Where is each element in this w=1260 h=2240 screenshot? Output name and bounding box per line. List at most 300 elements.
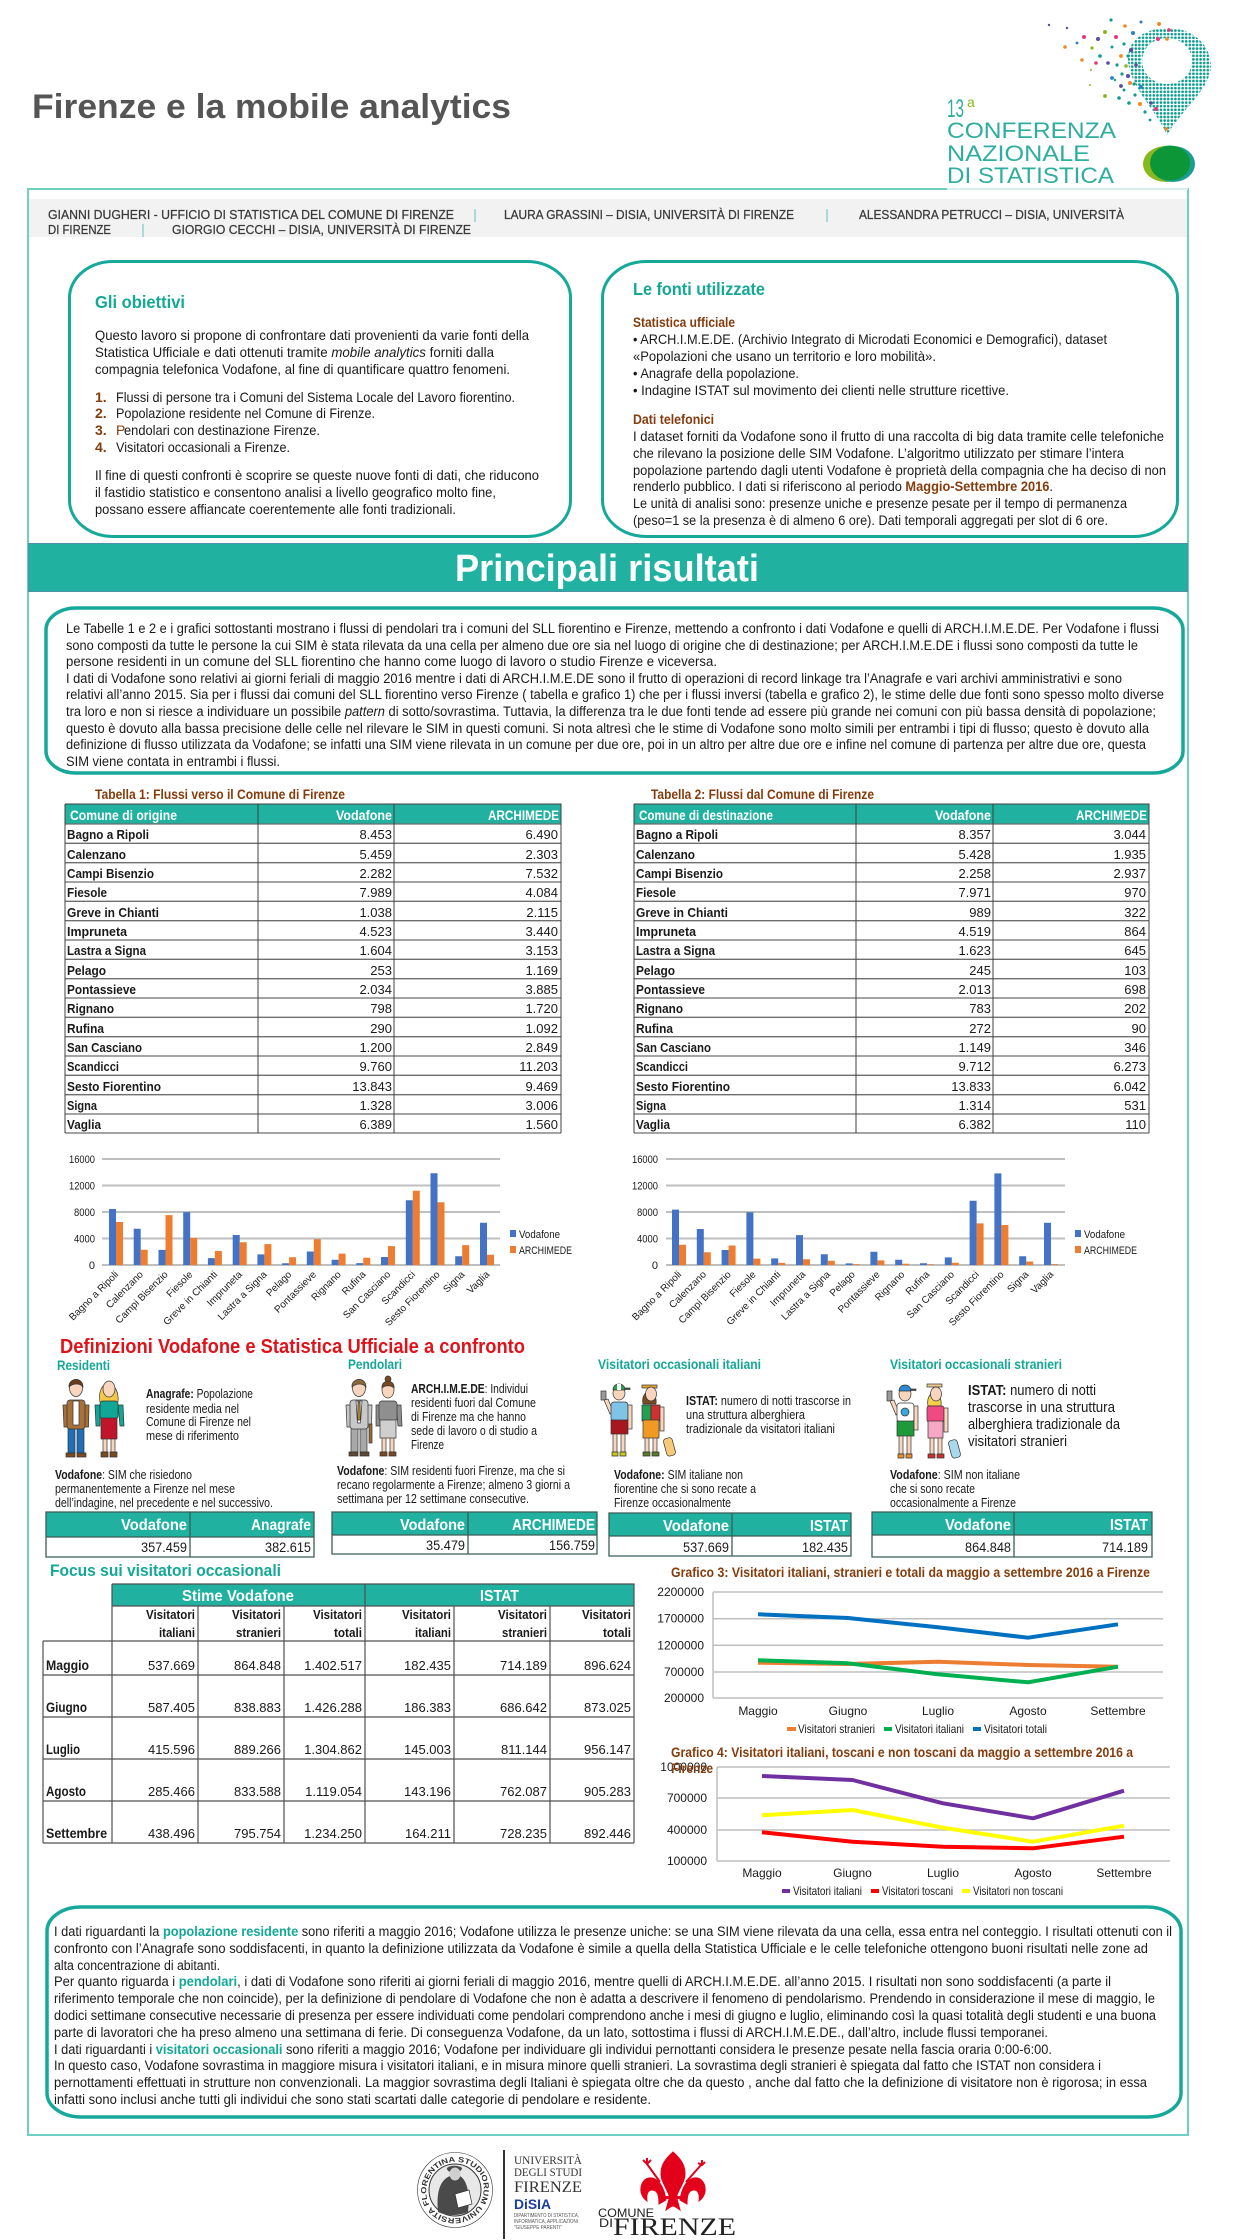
residenti table: 382.615 bbox=[265, 1539, 311, 1555]
table 2: Comune di destinazione bbox=[639, 808, 773, 823]
table 2: 9.712 bbox=[958, 1059, 991, 1074]
table values: 182.435 bbox=[404, 1658, 451, 1673]
chart 2: bar chart: 0 bbox=[652, 1260, 658, 1272]
table 1: Impruneta bbox=[67, 924, 128, 939]
table 2: Scandicci bbox=[636, 1059, 688, 1074]
icon: florentine lily bbox=[641, 2152, 705, 2210]
panel: conclusions: I dati riguardanti i visitatori occasionali sono riferiti a maggio 2016; Vodafone per individuare gli individui pernottanti considera le presenze pesate nella fascia oraria 0:00-6:00. bbox=[54, 2042, 1052, 2057]
table values: 956.147 bbox=[584, 1742, 631, 1757]
table 1: 1.200 bbox=[359, 1040, 392, 1055]
table 2: 2.937 bbox=[1113, 866, 1146, 881]
panel: text results: Le Tabelle 1 e 2 e i grafici sottostanti mostrano i flussi di pendolari tra i comuni del SLL fiorentino e Firenze, mettendo a confronto i dati Vodafone e quelli di ARCH.I.M.E.DE. Per Vodafone i flussi bbox=[66, 621, 1159, 636]
archimede definition: Firenze bbox=[411, 1437, 444, 1452]
chart 2: bar chart: Scandicci bbox=[944, 1269, 982, 1307]
numbered list: 2. bbox=[95, 405, 107, 421]
table 1: 4.084 bbox=[525, 885, 558, 900]
vodafone definition bbox=[890, 1467, 1020, 1510]
chart 1: bar chart: 0 bbox=[89, 1260, 95, 1272]
chart 3 legend bbox=[787, 1722, 1047, 1736]
vodafone definition: Vodafone: SIM italiane non bbox=[614, 1467, 743, 1482]
panel: conclusions: riferimento temporale che non coincide), per la definizione di pendolare di Vodafone che non è adatta a descrivere il fenomeno di pendolarismo. Prendendo in considerazione il mese di maggio, le bbox=[54, 1991, 1155, 2006]
chart 1: bar chart: Calenzano bbox=[104, 1269, 146, 1311]
table values: 1.304.862 bbox=[304, 1742, 362, 1757]
row labels: Giugno bbox=[46, 1699, 87, 1715]
vodafone definition: dell’indagine, nel precedente e nel successivo. bbox=[55, 1495, 273, 1510]
vodafone definition: Vodafone: SIM residenti fuori Firenze, ma che si bbox=[337, 1463, 565, 1478]
chart 1: bar chart bbox=[67, 1154, 572, 1329]
table 1: Comune di origine bbox=[70, 808, 177, 823]
authors strip: GIORGIO CECCHI – DISIA, UNIVERSITÀ DI FIRENZE bbox=[172, 222, 471, 237]
table values: 186.383 bbox=[404, 1700, 451, 1715]
chart 3 legend: Visitatori italiani bbox=[895, 1722, 964, 1736]
closing text: il fastidio statistico e consentono analisi a livello geografico molto fine, bbox=[95, 484, 496, 500]
istat definition bbox=[686, 1393, 851, 1436]
column headers: Visitatori bbox=[498, 1607, 547, 1622]
focus heading: Focus sui visitatori occasionali bbox=[50, 1561, 281, 1580]
column headers: Visitatori bbox=[146, 1607, 195, 1622]
chart 1: bar chart: Sesto Fiorentino bbox=[383, 1269, 443, 1329]
table 1: 2.303 bbox=[525, 847, 558, 862]
chart 2: bar chart: Signa bbox=[1005, 1269, 1032, 1295]
chart 4: line chart: 1000000 bbox=[660, 1760, 707, 1774]
logo: universita di firenze bbox=[417, 2150, 583, 2239]
chart 4: line chart: 100000 bbox=[667, 1854, 707, 1868]
logo wordmark: DI STATISTICA bbox=[947, 163, 1114, 188]
numbered list: Popolazione residente nel Comune di Firenze. bbox=[116, 405, 375, 421]
archimede definition: ARCH.I.M.E.DE: Individui bbox=[411, 1381, 528, 1396]
panel: conclusions: pernottamenti effettuati in strutture non convenzionali. La maggior sovrastima degli Italiani è spiegata oltre che da questo , anche dal fatto che la definizione di visitatore non è rigorosa; in essa bbox=[54, 2075, 1147, 2090]
chart 3: line chart: Giugno bbox=[829, 1704, 868, 1718]
icon: dotted pin bbox=[1048, 18, 1211, 135]
column headers: totali bbox=[334, 1625, 362, 1640]
chart 2 legend bbox=[1075, 1229, 1137, 1257]
chart 2: bar chart: Impruneta bbox=[769, 1269, 808, 1309]
focus table: ISTAT bbox=[480, 1588, 519, 1605]
table 2: ARCHIMEDE bbox=[1076, 808, 1147, 823]
vodafone definition: recano regolarmente a Firenze; almeno 3 giorni a bbox=[337, 1477, 571, 1492]
table 2: 1.149 bbox=[958, 1040, 991, 1055]
panel: text results: I dati di Vodafone sono relativi ai giorni feriali di maggio 2016 mentre i dati di ARCH.I.M.E.DE sono il frutto di operazioni di record linkage tra l’Anagrafe e vari archivi amministrativi e sono bbox=[66, 671, 1122, 686]
pendolari heading: Pendolari bbox=[348, 1356, 402, 1372]
table 1: Sesto Fiorentino bbox=[67, 1079, 161, 1094]
chart 2: bar chart: 16000 bbox=[632, 1154, 658, 1166]
pendolari table bbox=[332, 1512, 597, 1554]
chart 1: bar chart: Scandicci bbox=[380, 1269, 418, 1307]
numbered list bbox=[95, 389, 515, 455]
table 1: Pontassieve bbox=[67, 982, 136, 997]
table 1: 5.459 bbox=[359, 847, 392, 862]
chart 2: bar chart: Campi Bisenzio bbox=[677, 1269, 734, 1326]
table 2: Fiesole bbox=[636, 885, 676, 900]
vodafone definition: fiorentine che si sono recate a bbox=[614, 1481, 757, 1496]
residenti table bbox=[46, 1512, 314, 1557]
anagrafe definition: Anagrafe: Popolazione bbox=[146, 1386, 253, 1401]
pendolari table: 35.479 bbox=[426, 1537, 465, 1553]
table 2: 989 bbox=[969, 905, 991, 920]
istat definition: una struttura alberghiera bbox=[686, 1407, 806, 1422]
panel: pendolari bbox=[332, 1356, 597, 1554]
icon: commuters couple bbox=[346, 1376, 402, 1456]
vodafone definition bbox=[337, 1463, 571, 1506]
table 2: Pelago bbox=[636, 963, 675, 978]
table 2: 322 bbox=[1124, 905, 1146, 920]
chart 1 legend bbox=[510, 1229, 572, 1257]
table 2: Vodafone bbox=[935, 808, 991, 823]
chart 4: line chart: Luglio bbox=[927, 1866, 959, 1880]
column headers: totali bbox=[603, 1625, 631, 1640]
archimede definition: sede di lavoro o di studio a bbox=[411, 1423, 538, 1438]
table values: 873.025 bbox=[584, 1700, 631, 1715]
panel: text results: tra loro e non si riesce a individuare un possibile pattern di sotto/sovrastima. Tuttavia, la differenza tra le due fonti tende ad essere più grande nei comuni con più bassa densità di popolazione; bbox=[66, 704, 1156, 719]
table 2: Pontassieve bbox=[636, 982, 705, 997]
table 1: 2.849 bbox=[525, 1040, 558, 1055]
vodafone definition bbox=[55, 1467, 273, 1510]
table 1: 2.282 bbox=[359, 866, 392, 881]
table 2: 110 bbox=[1125, 1117, 1146, 1132]
table 2: 5.428 bbox=[958, 847, 991, 862]
panel: conclusions: dodici settimane consecutive necessarie di presenza per essere individuati come pendolari comprendono anche i mesi di giugno e luglio, eliminando così la quasi totalità degli studenti e una buona bbox=[54, 2008, 1156, 2023]
chart 2: bar chart: 12000 bbox=[632, 1180, 658, 1192]
icon: residents couple bbox=[63, 1379, 124, 1457]
panel: conclusions: In questo caso, Vodafone sovrastima in maggiore misura i visitatori italiani, e in misura minore quelli stranieri. La sovrastima degli stranieri è spiegata dal fatto che ISTAT non considera i bbox=[54, 2058, 1101, 2073]
dati telefonici: renderlo pubblico. I dati si riferiscono al periodo Maggio-Settembre 2016. bbox=[633, 478, 1053, 494]
table values: 905.283 bbox=[584, 1784, 631, 1799]
chart 2: bar chart: Fiesole bbox=[728, 1269, 759, 1300]
table 1: Greve in Chianti bbox=[67, 905, 159, 920]
panel: text results: SIM viene contata in entrambi i flussi. bbox=[66, 754, 280, 769]
panel: le fonti utilizzate bbox=[602, 262, 1178, 536]
table 1: 11.203 bbox=[519, 1059, 558, 1074]
table 2: 3.044 bbox=[1113, 827, 1146, 842]
chart 3: line chart: Agosto bbox=[1009, 1704, 1047, 1718]
table values: 714.189 bbox=[500, 1658, 547, 1673]
logo wordmark: a bbox=[967, 94, 975, 110]
table 2: 4.519 bbox=[958, 924, 991, 939]
column headers: stranieri bbox=[502, 1625, 547, 1640]
closing text: possano essere affiancate coerentemente alle fonti tradizionali. bbox=[95, 501, 456, 517]
chart 1: bar chart: Impruneta bbox=[205, 1269, 245, 1309]
icon: foreign tourists bbox=[887, 1384, 961, 1459]
table values: 811.144 bbox=[501, 1742, 547, 1757]
chart 4 legend: Visitatori non toscani bbox=[973, 1884, 1063, 1898]
table values: 143.196 bbox=[404, 1784, 451, 1799]
vodafone definition: occasionalmente a Firenze bbox=[890, 1495, 1016, 1510]
frame bbox=[28, 189, 1188, 2135]
vodafone definition bbox=[614, 1467, 757, 1510]
logo wordmark: NAZIONALE bbox=[947, 141, 1090, 166]
table 1: 1.560 bbox=[525, 1117, 558, 1132]
istat definition: visitatori stranieri bbox=[968, 1433, 1067, 1450]
table 1: 7.989 bbox=[359, 885, 392, 900]
visitatori stranieri table: 714.189 bbox=[1102, 1539, 1148, 1555]
table 1: Lastra a Signa bbox=[67, 943, 147, 958]
authors strip: GIANNI DUGHERI - UFFICIO DI STATISTICA DEL COMUNE DI FIRENZE bbox=[48, 208, 454, 222]
comune wordmark: COMUNE bbox=[598, 2206, 654, 2220]
table 1: Rufina bbox=[67, 1021, 105, 1036]
table 2: 698 bbox=[1124, 982, 1146, 997]
authors strip: DI FIRENZE bbox=[48, 223, 111, 237]
table 2: 645 bbox=[1124, 943, 1146, 958]
statistica ufficiale: • Anagrafe della popolazione. bbox=[633, 365, 799, 381]
table 2: 103 bbox=[1124, 963, 1146, 978]
chart 3 title: Grafico 3: Visitatori italiani, stranieri e totali da maggio a settembre 2016 a Firenze bbox=[671, 1564, 1150, 1580]
chart 1: bar chart: 8000 bbox=[74, 1207, 95, 1219]
column headers: stranieri bbox=[236, 1625, 281, 1640]
chart 1: bar chart: Campi Bisenzio bbox=[114, 1269, 171, 1326]
table 1: 6.389 bbox=[359, 1117, 392, 1132]
pendolari table: Vodafone bbox=[400, 1517, 465, 1534]
table 1: 3.885 bbox=[525, 982, 558, 997]
chart 2: bar chart: Sesto Fiorentino bbox=[947, 1269, 1007, 1329]
vodafone definition: permanentemente a Firenze nel mese bbox=[55, 1481, 235, 1496]
table 1: 3.440 bbox=[525, 924, 558, 939]
dati telefonici: Dati telefonici bbox=[633, 411, 714, 427]
table 1: 1.328 bbox=[359, 1098, 392, 1113]
table 2: 864 bbox=[1124, 924, 1146, 939]
table values: 145.003 bbox=[404, 1742, 451, 1757]
visitatori italiani table: 182.435 bbox=[802, 1539, 848, 1555]
column headers: Visitatori bbox=[402, 1607, 451, 1622]
chart 1: bar chart: Rignano bbox=[310, 1269, 344, 1303]
chart 3: line chart: Maggio bbox=[738, 1704, 778, 1718]
table 1: 2.115 bbox=[526, 905, 558, 920]
dati telefonici: che rilevano la posizione delle SIM Vodafone. L’algoritmo utilizzato per stimare l’intera bbox=[633, 445, 1124, 461]
table 2 title: Tabella 2: Flussi dal Comune di Firenze bbox=[651, 787, 874, 802]
statistica ufficiale: «Popolazioni che usano un territorio e loro mobilità». bbox=[633, 348, 936, 364]
panel: gli obiettivi bbox=[70, 262, 570, 536]
panel: visitatori italiani bbox=[598, 1356, 851, 1556]
chart 2: bar chart: Pelago bbox=[828, 1269, 858, 1299]
visitatori italiani table: 537.669 bbox=[683, 1539, 729, 1555]
university wordmark: DIPARTIMENTO DI STATISTICA, bbox=[514, 2213, 579, 2219]
chart 1 legend: ARCHIMEDE bbox=[519, 1245, 572, 1257]
chart 4: line chart: Maggio bbox=[742, 1866, 782, 1880]
table 1: 1.092 bbox=[525, 1021, 558, 1036]
istat definition: alberghiera tradizionale da bbox=[968, 1416, 1121, 1433]
dati telefonici: Le unità di analisi sono: presenze uniche e presenze pesate per il tempo di permanenza bbox=[633, 495, 1127, 511]
statistica ufficiale: • Indagine ISTAT sul movimento dei clienti nelle strutture ricettive. bbox=[633, 382, 1009, 398]
focus table bbox=[43, 1584, 634, 1843]
chart 4 title: Grafico 4: Visitatori italiani, toscani e non toscani da maggio a settembre 2016 a bbox=[671, 1744, 1133, 1760]
chart 1: bar chart: Signa bbox=[441, 1269, 468, 1295]
table 1: 8.453 bbox=[359, 827, 392, 842]
chart 2: bar chart: 8000 bbox=[637, 1207, 658, 1219]
table 1: 1.720 bbox=[525, 1001, 558, 1016]
table 1: Campi Bisenzio bbox=[67, 866, 154, 881]
table values: 892.446 bbox=[584, 1826, 631, 1841]
table values: 1.234.250 bbox=[304, 1826, 362, 1841]
table 1 bbox=[65, 787, 561, 1133]
table values: 838.883 bbox=[234, 1700, 281, 1715]
university wordmark: UNIVERSITÀ bbox=[514, 2153, 583, 2167]
chart 3 legend: Visitatori stranieri bbox=[798, 1722, 875, 1736]
table 2: Impruneta bbox=[636, 924, 697, 939]
panel: text results: sono composti da tutte le persone la cui SIM è stata rilevata da una cella per almeno due ore sia nel luogo di origine che di destinazione; per ARCH.I.M.E.DE i flussi sono composti da tutte le bbox=[66, 638, 1138, 653]
chart 1: bar chart: Bagno a Ripoli bbox=[67, 1269, 121, 1323]
istat definition: trascorse in una struttura bbox=[968, 1399, 1116, 1416]
visitatori stranieri table: 864.848 bbox=[965, 1539, 1011, 1555]
intro text bbox=[95, 327, 529, 377]
comune wordmark: DI bbox=[599, 2216, 613, 2230]
table 1: 4.523 bbox=[359, 924, 392, 939]
chart 1: bar chart: Rufina bbox=[340, 1269, 369, 1298]
table values: 686.642 bbox=[500, 1700, 547, 1715]
table 2: 1.314 bbox=[958, 1098, 991, 1113]
panel: conclusions: parte di lavoratori che ha preso almeno una settimana di ferie. Di conseguenza Vodafone, da un lato, sottostima i flussi di ARCH.I.M.E.DE., dall’altro, include flussi temporanei. bbox=[54, 2025, 1048, 2040]
statistica ufficiale: Statistica ufficiale bbox=[633, 314, 735, 330]
chart 3: line chart: Settembre bbox=[1090, 1704, 1146, 1718]
table 1: 253 bbox=[370, 963, 392, 978]
panel: text results: definizione di flusso utilizzata da Vodafone; se infatti una SIM viene rilevata in un comune per due ore, poi in un altro per altre due ore e infine nel comune di partenza per altre due ore, questa bbox=[66, 737, 1146, 752]
authors strip: ALESSANDRA PETRUCCI – DISIA, UNIVERSITÀ bbox=[859, 207, 1125, 222]
panel: text results: persone residenti in un comune del SLL fiorentino che hanno come luogo di lavoro o studio Firenze e viceversa. bbox=[66, 654, 717, 669]
chart 3: line chart: 700000 bbox=[664, 1665, 704, 1679]
table 1: 798 bbox=[370, 1001, 392, 1016]
table 2: 970 bbox=[1124, 885, 1146, 900]
university wordmark: DiSIA bbox=[514, 2196, 551, 2212]
table values: 415.596 bbox=[148, 1742, 195, 1757]
chart 4: line chart: 700000 bbox=[667, 1791, 707, 1805]
chart 2 legend: Vodafone bbox=[1084, 1229, 1125, 1241]
table 2: Campi Bisenzio bbox=[636, 866, 723, 881]
dati telefonici bbox=[633, 411, 1166, 528]
table 1: 1.604 bbox=[359, 943, 392, 958]
logo wordmark bbox=[947, 94, 1116, 188]
dati telefonici: I dataset forniti da Vodafone sono il frutto di una raccolta di big data tramite celle telefoniche bbox=[633, 428, 1164, 444]
row labels: Maggio bbox=[46, 1657, 89, 1673]
logo wordmark: 13 bbox=[947, 95, 964, 123]
title: Firenze e la mobile analytics bbox=[32, 88, 511, 126]
vodafone definition: settimana per 12 settimane consecutive. bbox=[337, 1491, 529, 1506]
chart 3: line chart: 200000 bbox=[664, 1691, 704, 1705]
table 1: Fiesole bbox=[67, 885, 107, 900]
table 2: 7.971 bbox=[958, 885, 991, 900]
banner: principali risultati: Principali risultati bbox=[455, 548, 759, 590]
table 1: San Casciano bbox=[67, 1040, 142, 1055]
chart 4: line chart: 400000 bbox=[667, 1823, 707, 1837]
visitatori italiani table: ISTAT bbox=[810, 1518, 848, 1535]
chart 3: line chart: 1200000 bbox=[657, 1638, 704, 1652]
intro text: compagnia telefonica Vodafone, al fine di quantificare quattro fenomeni. bbox=[95, 361, 510, 377]
university wordmark: "GIUSEPPE PARENTI" bbox=[514, 2225, 562, 2231]
chart 4 title: Firenze bbox=[671, 1760, 713, 1776]
table 2: Calenzano bbox=[636, 847, 695, 862]
university seal bbox=[417, 2152, 493, 2228]
chart 3: line chart: 1700000 bbox=[657, 1612, 704, 1626]
table values: 728.235 bbox=[500, 1826, 547, 1841]
table values: 438.496 bbox=[148, 1826, 195, 1841]
table 2: 245 bbox=[969, 963, 991, 978]
archimede definition: residenti fuori dal Comune bbox=[411, 1395, 536, 1410]
table values: 164.211 bbox=[405, 1826, 451, 1841]
numbered list: 4. bbox=[95, 439, 107, 455]
archimede definition: di Firenze ma che hanno bbox=[411, 1409, 526, 1424]
chart 1: bar chart: 4000 bbox=[74, 1234, 95, 1246]
table 2: 6.273 bbox=[1113, 1059, 1146, 1074]
table 2 bbox=[634, 787, 1149, 1133]
table 2: 346 bbox=[1124, 1040, 1146, 1055]
table 2: 531 bbox=[1124, 1098, 1146, 1113]
chart 2 legend: ARCHIMEDE bbox=[1084, 1245, 1137, 1257]
table 1: Calenzano bbox=[67, 847, 126, 862]
chart 3: line chart: Luglio bbox=[922, 1704, 954, 1718]
table values: 833.588 bbox=[234, 1784, 281, 1799]
table 1: 6.490 bbox=[525, 827, 558, 842]
university seal: FLORENTINA STUDIORUM UNIVERSITAS bbox=[421, 2156, 489, 2224]
chart 4: line chart: Giugno bbox=[833, 1866, 872, 1880]
heading: Le fonti utilizzate bbox=[633, 279, 765, 299]
table 2: 6.042 bbox=[1113, 1079, 1146, 1094]
chart 2: bar chart: Rufina bbox=[904, 1269, 932, 1298]
row labels: Luglio bbox=[46, 1741, 80, 1757]
chart 4 legend: Visitatori toscani bbox=[882, 1884, 953, 1898]
table 2: Bagno a Ripoli bbox=[636, 827, 718, 842]
focus table: Stime Vodafone bbox=[182, 1588, 294, 1605]
chart 1: bar chart: Vaglia bbox=[465, 1269, 492, 1296]
vodafone definition: Vodafone: SIM non italiane bbox=[890, 1467, 1020, 1482]
panel: text results: questo è dovuto alla bassa precisione delle celle nel rilevare le SIM in questi comuni. Si nota altresì che le stime di Vodafone sono molto simili per entrambi i tipi di flusso; questo è dovuto alla bbox=[66, 721, 1149, 736]
panel: conclusions: I dati riguardanti la popolazione residente sono riferiti a maggio 2016; Vodafone utilizza le presenze uniche: se una SIM viene rilevata da una cella, essa entra nel conteggio. I risultati ottenuti con il bbox=[54, 1924, 1172, 1939]
intro text: Questo lavoro si propone di confrontare dati provenienti da varie fonti della bbox=[95, 327, 529, 343]
logo wordmark: CONFERENZA bbox=[947, 118, 1116, 143]
comune wordmark bbox=[598, 2206, 736, 2240]
chart 1: bar chart: San Casciano bbox=[341, 1269, 393, 1321]
table 2: 202 bbox=[1124, 1001, 1146, 1016]
table values: 762.087 bbox=[500, 1784, 547, 1799]
vodafone definition: che si sono recate bbox=[890, 1481, 975, 1496]
visitatori stranieri table: ISTAT bbox=[1110, 1517, 1148, 1534]
table 2: 1.623 bbox=[958, 943, 991, 958]
table 2: 2.013 bbox=[958, 982, 991, 997]
table 1: 3.153 bbox=[525, 943, 558, 958]
table 1: Scandicci bbox=[67, 1059, 119, 1074]
intro text: Statistica Ufficiale e dati ottenuti tramite mobile analytics forniti dalla bbox=[95, 344, 494, 360]
chart 1: bar chart: Fiesole bbox=[165, 1269, 196, 1300]
numbered list: 1. bbox=[95, 389, 107, 405]
chart 3: line chart bbox=[657, 1564, 1163, 1736]
column headers bbox=[146, 1607, 631, 1640]
table 1: 2.034 bbox=[359, 982, 392, 997]
column headers: italiani bbox=[159, 1625, 195, 1640]
chart 2: bar chart: Pontassieve bbox=[836, 1269, 883, 1316]
chart 1: bar chart: 16000 bbox=[69, 1154, 95, 1166]
numbered list: Flussi di persone tra i Comuni del Sistema Locale del Lavoro fiorentino. bbox=[116, 389, 515, 405]
column headers: italiani bbox=[415, 1625, 451, 1640]
table values: 1.426.288 bbox=[304, 1700, 362, 1715]
chart 2: bar chart bbox=[630, 1154, 1137, 1329]
chart 3: line chart: 2200000 bbox=[657, 1585, 704, 1599]
visitatori stranieri table: Vodafone bbox=[945, 1517, 1011, 1534]
table values: 537.669 bbox=[148, 1658, 195, 1673]
residenti heading: Residenti bbox=[57, 1357, 110, 1373]
icon: italian tourists bbox=[601, 1384, 676, 1457]
chart 2: bar chart: San Casciano bbox=[905, 1269, 957, 1321]
istat definition: ISTAT: numero di notti trascorse in bbox=[686, 1393, 851, 1408]
chart 2: bar chart: Vaglia bbox=[1029, 1269, 1056, 1296]
row labels bbox=[46, 1657, 107, 1841]
heading: definizioni: Definizioni Vodafone e Statistica Ufficiale a confronto bbox=[60, 1336, 525, 1358]
table values: 795.754 bbox=[234, 1826, 281, 1841]
table 1: 290 bbox=[370, 1021, 392, 1036]
table 2: 8.357 bbox=[958, 827, 991, 842]
chart 3 legend: Visitatori totali bbox=[984, 1722, 1047, 1736]
table 1: 9.469 bbox=[525, 1079, 558, 1094]
table 2: 6.382 bbox=[958, 1117, 991, 1132]
table 2: Rufina bbox=[636, 1021, 674, 1036]
table values: 864.848 bbox=[234, 1658, 281, 1673]
istat definition: tradizionale da visitatori italiani bbox=[686, 1421, 835, 1436]
column headers: Visitatori bbox=[582, 1607, 631, 1622]
